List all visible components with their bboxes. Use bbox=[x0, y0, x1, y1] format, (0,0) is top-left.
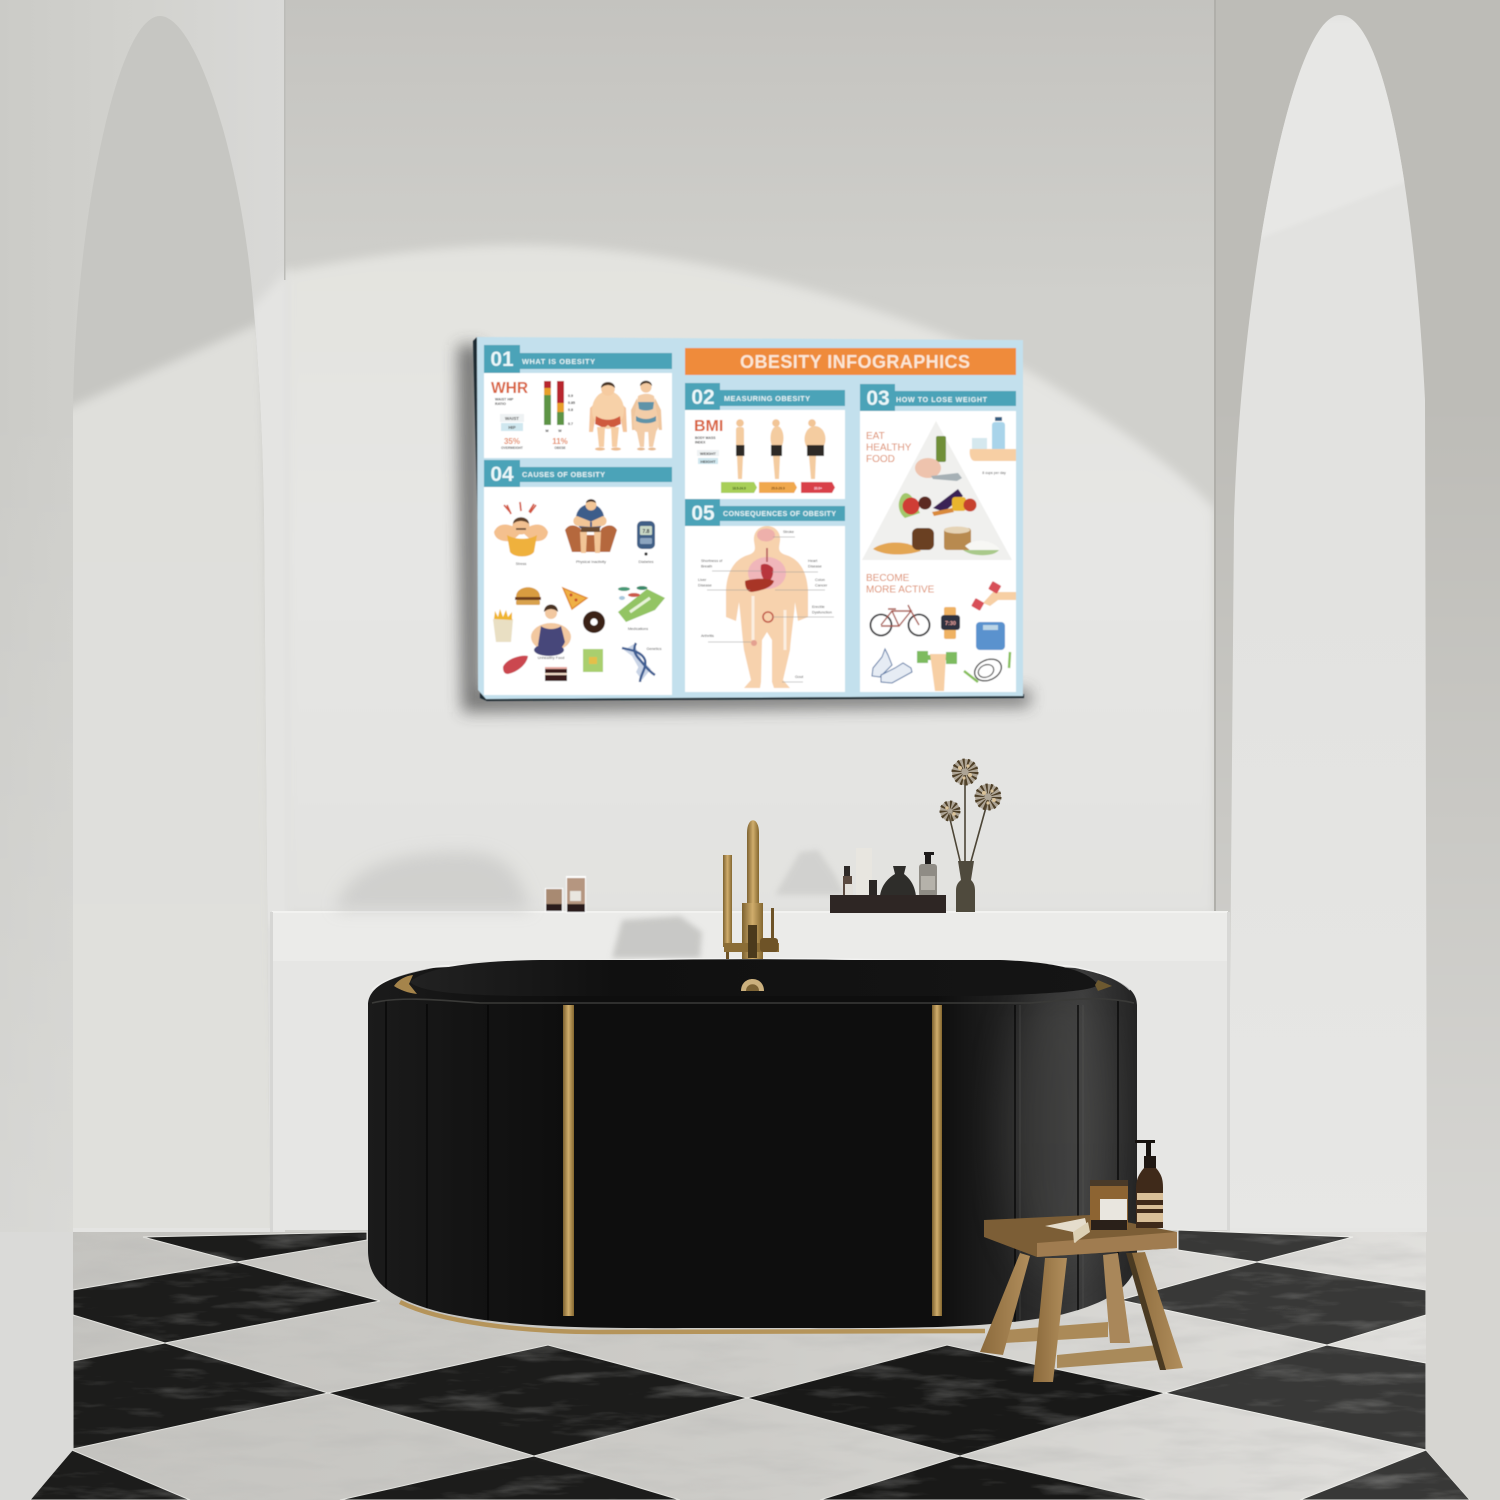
BMI category arrows: 18.5-24.9 bbox=[732, 486, 746, 490]
mixer bar bbox=[724, 943, 779, 952]
WHR text block: HIP bbox=[508, 425, 516, 430]
bathtub bbox=[368, 958, 1137, 1332]
heading: eat healthy food bbox=[866, 431, 912, 465]
WHR text block bbox=[491, 380, 568, 450]
icon: chips bag bbox=[583, 649, 603, 672]
section 04 header: CAUSES OF OBESITY bbox=[522, 470, 605, 479]
WHR bar chart: 0.8 bbox=[568, 408, 573, 412]
body bbox=[742, 903, 763, 959]
lungs bbox=[748, 557, 786, 589]
anatomy labels: Stroke bbox=[783, 530, 794, 534]
dropper bottle bbox=[843, 866, 853, 896]
icon: smartwatch: 7:30 bbox=[945, 621, 956, 627]
section 01 header: WHAT IS OBESITY bbox=[522, 357, 595, 366]
section 02 header: 02 bbox=[691, 386, 715, 409]
WHR text block: OVERWEIGHT bbox=[501, 446, 523, 450]
heading: eat healthy food: FOOD bbox=[866, 454, 895, 465]
heading: become more active bbox=[866, 573, 935, 596]
WHR bar chart: W bbox=[558, 429, 562, 433]
liver bbox=[745, 579, 774, 592]
section 04 header bbox=[484, 460, 672, 487]
gold strip right bbox=[932, 1005, 942, 1316]
left outer wall lower light bbox=[0, 400, 285, 1500]
wooden stool with jar and bottle bbox=[980, 1140, 1183, 1382]
heading: become more active: BECOME bbox=[866, 573, 910, 584]
skeleton hint bbox=[753, 596, 785, 650]
stems bbox=[949, 775, 988, 865]
BMI category arrows bbox=[721, 482, 835, 493]
stool top bbox=[984, 1215, 1177, 1257]
title banner bbox=[685, 348, 1016, 375]
WHR bar chart: 0.85 bbox=[568, 401, 575, 405]
icon: running shoes bbox=[872, 649, 912, 683]
right arch niche bbox=[1228, 15, 1427, 1240]
right foreground wall base bbox=[1426, 1232, 1500, 1500]
WHR bar chart: 0.9 bbox=[568, 394, 573, 398]
food pyramid bbox=[862, 421, 1012, 560]
WHR text block: WAIST bbox=[505, 416, 519, 421]
right arch light band bbox=[1261, 23, 1404, 236]
oil bottle bbox=[936, 436, 946, 462]
heading: eat healthy food: EAT bbox=[866, 431, 885, 442]
anatomy labels: Arthritis bbox=[701, 634, 714, 638]
flower heads bbox=[944, 764, 996, 818]
icon: smartwatch bbox=[941, 607, 960, 639]
anatomy labels: Disease bbox=[698, 584, 712, 588]
toiletry tray shadow bbox=[775, 850, 845, 895]
icon: medication: Medications bbox=[628, 627, 648, 631]
gold base band bbox=[400, 1302, 985, 1332]
flower seed specks bbox=[945, 764, 996, 816]
candle jar bbox=[1090, 1180, 1128, 1230]
section 02 header bbox=[685, 383, 845, 410]
canvas side edges bbox=[473, 337, 1024, 701]
left arch light wedge bbox=[73, 324, 270, 1228]
glass vase bbox=[956, 861, 975, 912]
section 05 header bbox=[685, 499, 845, 526]
anatomy labels: Liver bbox=[698, 578, 707, 582]
icon: burger bbox=[515, 587, 541, 605]
icon: bathroom scale bbox=[976, 622, 1005, 650]
WHR bar chart: 0.7 bbox=[568, 422, 573, 426]
back wall bbox=[285, 0, 1215, 1240]
icon: overeating woman bbox=[531, 604, 571, 660]
right outer wall lower light bbox=[1215, 400, 1500, 1500]
gold rim accent left bbox=[394, 975, 417, 994]
pump bottle bbox=[919, 852, 937, 897]
anatomy labels: Shortness of bbox=[701, 559, 723, 563]
anatomy labels bbox=[698, 530, 834, 682]
icon: water bottle and glass bbox=[970, 417, 1016, 475]
candles on ledge bbox=[545, 876, 586, 913]
icon: DNA: Genetics bbox=[647, 647, 662, 651]
gold rim accent right bbox=[1095, 980, 1112, 991]
book bbox=[1045, 1218, 1090, 1243]
pump bottle bbox=[1135, 1140, 1163, 1228]
icon: stress bbox=[494, 502, 548, 566]
heading: become more active: MORE ACTIVE bbox=[866, 584, 935, 596]
icon: jump rope bbox=[964, 652, 1010, 685]
mixer lever bbox=[771, 908, 774, 944]
icon: stress: Stress bbox=[516, 562, 526, 566]
panel 01: what is obesity bbox=[484, 345, 672, 458]
icon: DNA bbox=[622, 643, 662, 682]
brain bbox=[757, 528, 775, 542]
white tube bbox=[856, 848, 872, 895]
icon: pizza bbox=[563, 588, 587, 609]
anatomy labels: Gout bbox=[795, 675, 804, 679]
heart bbox=[761, 564, 773, 583]
body silhouette bbox=[726, 526, 808, 688]
WHR bar chart bbox=[544, 381, 575, 433]
icon: obese man side bbox=[804, 419, 826, 479]
icon: bicycle bbox=[870, 605, 930, 636]
panel 04: causes of obesity bbox=[484, 460, 672, 695]
wall edge right bbox=[1214, 0, 1216, 912]
anatomy figure bbox=[698, 526, 834, 688]
canvas background bbox=[477, 337, 1023, 699]
section 01 header bbox=[484, 345, 672, 373]
arch shadow on wall bbox=[336, 852, 530, 910]
panel 03: how to lose weight bbox=[860, 384, 1016, 692]
panel 02: measuring obesity bbox=[685, 383, 845, 499]
checkerboard marble floor bbox=[30, 1230, 1470, 1500]
icon: obese woman bbox=[631, 381, 662, 450]
trachea bbox=[766, 548, 768, 562]
icon: glucose meter: 7.8 bbox=[643, 529, 650, 535]
WHR text block: OBESE bbox=[554, 446, 566, 450]
main spout bbox=[747, 820, 759, 905]
side rod bbox=[726, 945, 729, 959]
anatomy labels: Colon bbox=[815, 578, 825, 582]
icon: donut bbox=[583, 611, 605, 633]
icon: slim man bbox=[736, 419, 744, 479]
section 01 header: 01 bbox=[490, 348, 514, 371]
infographic canvas shadow bbox=[458, 345, 1030, 712]
BMI category arrows: 25.0-29.9 bbox=[771, 486, 785, 490]
small dark bottle bbox=[869, 880, 877, 896]
faucet shadow on ledge bbox=[612, 916, 702, 958]
icon: glucose meter: Diabetes bbox=[638, 560, 654, 564]
icon: overeating woman: Unhealthy Food bbox=[538, 656, 564, 660]
icon: obese man bbox=[589, 382, 627, 451]
icon: overweight man bbox=[770, 419, 784, 479]
breads and grains bbox=[873, 542, 921, 555]
heading: eat healthy food: HEALTHY bbox=[866, 442, 912, 454]
BMI text block: BODY MASS bbox=[695, 436, 716, 440]
WHR text block: WHR bbox=[491, 380, 528, 397]
tray box bbox=[830, 895, 946, 913]
WHR text block: RATIO bbox=[495, 402, 506, 406]
infographic canvas bbox=[473, 337, 1024, 701]
WHR text block: 35% bbox=[504, 437, 520, 446]
icon: steak bbox=[503, 656, 528, 674]
icon: water bottle and glass: 8 cups per day bbox=[982, 471, 1006, 475]
left pier light bbox=[250, 268, 290, 925]
left foreground wall base bbox=[0, 1232, 73, 1500]
icon: physical inactivity on armchair: Physical Inactivity bbox=[576, 560, 606, 564]
stem bbox=[748, 925, 757, 958]
wall edge between pier and back wall bbox=[284, 0, 286, 280]
BMI text block: WEIGHT bbox=[700, 451, 717, 456]
section 04 header: 04 bbox=[490, 463, 514, 486]
mixer knob bbox=[760, 938, 778, 952]
title banner: OBESITY INFOGRAPHICS bbox=[740, 352, 970, 372]
anatomy labels: Heart bbox=[808, 559, 818, 563]
icon: weight in hand bbox=[971, 581, 1016, 611]
tub body bbox=[368, 959, 1137, 1328]
overflow knob bbox=[741, 979, 764, 991]
BMI text block: INDEX bbox=[695, 440, 706, 444]
icon: physical inactivity on armchair bbox=[565, 499, 617, 564]
BMI text block bbox=[694, 418, 723, 464]
BMI text block: BMI bbox=[694, 418, 723, 435]
dark jar bbox=[880, 866, 916, 896]
left outer wall bbox=[0, 0, 285, 1500]
panel 05: consequences of obesity bbox=[685, 499, 845, 692]
stool legs and stretchers bbox=[980, 1252, 1183, 1382]
icon: medication bbox=[618, 586, 665, 631]
WHR text block: WAIST HIP bbox=[495, 398, 514, 402]
flower haze bbox=[940, 759, 1001, 821]
vegetables bbox=[899, 493, 920, 518]
tub basin bbox=[410, 960, 1098, 996]
stool front face bbox=[1037, 1232, 1177, 1257]
meat and fish bbox=[915, 458, 941, 478]
section 03 header: 03 bbox=[866, 387, 890, 410]
BMI category arrows: 30.0+ bbox=[814, 486, 822, 490]
section 03 header bbox=[860, 384, 1016, 411]
tub seams and leather sheen bbox=[372, 980, 1134, 1325]
icon: glucose meter bbox=[637, 521, 655, 564]
section 02 header: MEASURING OBESITY bbox=[724, 394, 810, 403]
icon: fries bbox=[493, 609, 513, 642]
low ledge bbox=[73, 911, 1426, 1236]
side handshower bbox=[723, 855, 732, 947]
anatomy labels: Disease bbox=[808, 564, 822, 568]
rim highlight bbox=[372, 958, 1130, 990]
anatomy labels: Cancer bbox=[815, 584, 828, 588]
vase with dried flowers bbox=[940, 759, 1001, 912]
knee bbox=[751, 640, 757, 646]
section 03 header: HOW TO LOSE WEIGHT bbox=[896, 395, 988, 404]
right outer wall bbox=[1215, 0, 1500, 1500]
gold strip left bbox=[563, 1005, 574, 1316]
icon: dumbbell in hand bbox=[917, 651, 957, 691]
brass faucet bbox=[723, 820, 779, 959]
sunlight patch on back wall bbox=[285, 245, 1215, 915]
section 05 header: CONSEQUENCES OF OBESITY bbox=[723, 509, 836, 518]
WHR bar chart: M bbox=[546, 429, 548, 433]
toiletry tray bbox=[830, 848, 946, 913]
section 05 header: 05 bbox=[691, 502, 715, 525]
icon: cake bbox=[545, 667, 567, 681]
WHR text block: 11% bbox=[552, 437, 568, 446]
anatomy labels: Erectile bbox=[812, 605, 825, 609]
anatomy labels: Dysfunction bbox=[812, 610, 832, 614]
intestine bbox=[763, 612, 773, 622]
left arch niche bbox=[73, 16, 270, 1240]
anatomy labels: Breath bbox=[701, 564, 712, 568]
BMI text block: HEIGHT bbox=[700, 459, 716, 464]
